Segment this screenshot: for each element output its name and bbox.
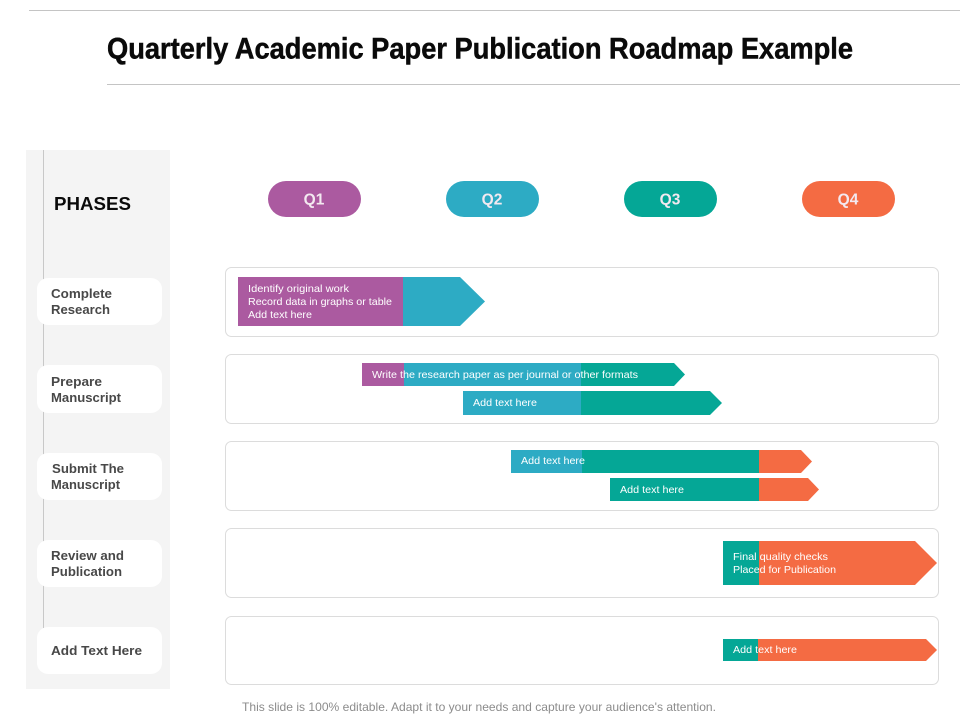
panel: row 1 complete research [226,268,938,336]
panel: row 5 add text here [226,616,938,684]
arrow bar: add text here: Add text here [473,397,537,409]
arrow bar: write the research paper: Write the research paper as per journal or other formats [372,369,638,381]
quarter pill: Q2: Q2 [482,192,502,208]
arrow bar: add text here: Add text here [733,644,797,656]
phase: complete research [37,278,162,325]
arrow bar: add text here upper: Add text here [521,455,585,467]
panel: row 3 submit the manuscript [226,442,938,510]
quarter pill: Q4: Q4 [838,192,859,208]
phase: prepare manuscript: Prepare [51,374,102,389]
arrow bar: identify original work: Record data in graphs or table [248,296,392,308]
quarter pill: Q1 [268,181,361,217]
phase: complete research: Research [51,302,110,317]
quarter pill: Q2 [446,181,539,217]
phase: submit the manuscript: Submit The [52,461,124,476]
footer note: This slide is 100% editable. Adapt it to your needs and capture your audience's attention. [242,700,716,714]
quarter pill: Q1: Q1 [304,192,325,208]
phase: prepare manuscript: Manuscript [51,390,122,405]
panel: phases sidebar [26,150,170,689]
title: Quarterly Academic Paper Publication Roadmap Example [107,32,853,66]
phase: submit the manuscript: Manuscript [51,477,121,492]
arrow bar: identify original work: Add text here [248,309,312,321]
heading: phases: PHASES [54,194,131,214]
panel: row 2 prepare manuscript [226,354,938,424]
panel: row 4 review and publication [226,528,938,598]
phase: review and publication [37,540,162,587]
arrow bar: final quality checks [723,541,937,585]
arrow bar: add text here upper [511,450,812,473]
arrow bar: identify original work [238,277,485,326]
arrow bar: final quality checks: Placed for Publication [733,564,836,576]
arrow bar: identify original work: Identify original work [248,283,350,295]
phase: add text here: Add Text Here [51,643,142,658]
arrow bar: add text here lower: Add text here [620,484,684,496]
arrow bar: add text here [463,391,722,415]
quarter pill: Q3 [624,181,717,217]
phase: submit the manuscript [37,453,162,500]
arrow bar: final quality checks: Final quality checks [733,551,828,563]
phase: review and publication: Publication [51,564,122,579]
arrow bar: add text here [723,639,937,661]
phase: complete research: Complete [51,286,112,301]
phase: prepare manuscript [37,365,162,413]
quarter pill: Q4 [802,181,895,217]
phase: review and publication: Review and [51,548,124,563]
arrow bar: write the research paper [362,363,685,386]
quarter pill: Q3: Q3 [660,192,681,208]
arrow bar: add text here lower [610,478,819,501]
phase: add text here [37,627,162,674]
